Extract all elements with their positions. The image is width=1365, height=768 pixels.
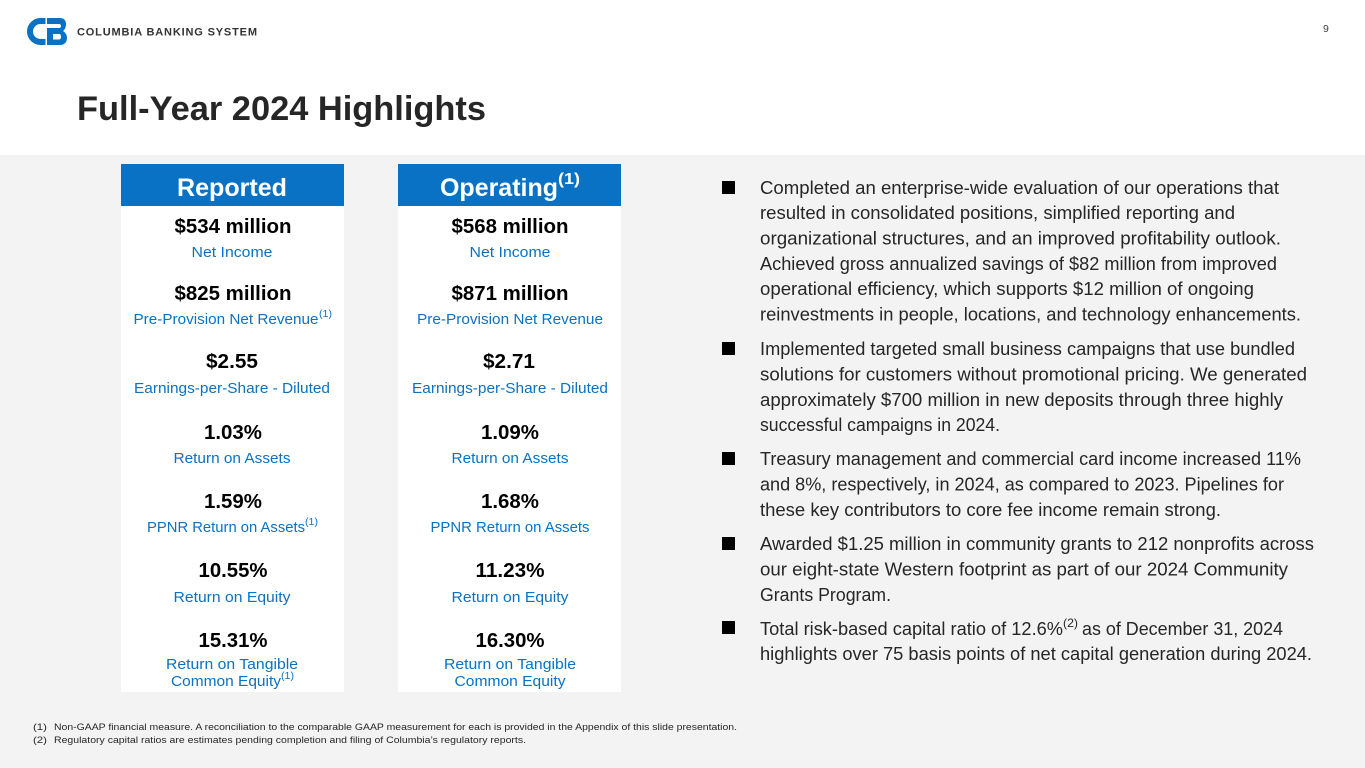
logo wordmark: COLUMBIA BANKING SYSTEM: [77, 26, 257, 38]
bullet 5: capital ratio: Total risk-based capital ratio of 12.6%: [760, 618, 1063, 639]
metric: ROTCE: Return on Tangible: [444, 657, 576, 673]
bullet 3: treasury management: [722, 448, 1301, 520]
metric: ROA: Return on Assets: [452, 451, 568, 467]
bullet 1: enterprise-wide evaluation: [722, 177, 1301, 324]
metric: net income: [452, 216, 568, 261]
bullet 5: capital ratio: (2): [1063, 616, 1078, 630]
footnotes: (1): [33, 722, 47, 733]
metric: PPNR ROA: PPNR Return on Assets: [430, 520, 590, 536]
bullet 4: community grants: our eight-state Western footprint as part of our 2024 Community: [760, 558, 1289, 580]
metric: ROA: [174, 422, 290, 467]
footnotes: (2): [33, 735, 47, 746]
metric: ROTCE: Common Equity: [171, 674, 282, 690]
panel header: Operating: (1): [558, 171, 580, 188]
bullet 3: treasury management: these key contributors to core fee income remain strong.: [760, 499, 1221, 520]
panel: Reported: [121, 164, 344, 692]
metric: ROE: Return on Equity: [452, 590, 569, 606]
content background: [0, 155, 1365, 768]
metric: PPNR ROA: 1.59%: [204, 491, 262, 513]
bullet 5: capital ratio: as of December 31, 2024: [1082, 618, 1283, 639]
metric: PPNR: Pre-Provision Net Revenue: [417, 312, 603, 328]
panel: Operating: [398, 164, 621, 692]
bullet 4: community grants: [722, 533, 1314, 605]
metric: EPS: $2.71: [483, 351, 535, 373]
metric: ROE: [174, 560, 291, 606]
bullet 1: enterprise-wide evaluation: reinvestments in people, locations, and technology enhancements.: [760, 304, 1301, 324]
metric: net income: Net Income: [192, 245, 272, 261]
metric: net income: Net Income: [470, 245, 550, 261]
bullet 1: enterprise-wide evaluation: operational efficiency, which supports $12 million of ongoing: [760, 278, 1254, 299]
metric: ROTCE: 16.30%: [476, 630, 545, 652]
metric: ROE: Return on Equity: [174, 590, 291, 606]
metric: net income: $568 million: [452, 216, 568, 238]
bullet 2: small business campaigns: approximately $700 million in new deposits through three highly: [760, 389, 1284, 410]
metric: ROTCE: Return on Tangible: [166, 657, 298, 673]
metric: net income: [174, 216, 292, 261]
bullet 5: capital ratio: highlights over 75 basis points of net capital generation during 2024.: [760, 643, 1312, 664]
bullet 1: enterprise-wide evaluation: organizational structures, and an improved profitability outlook.: [760, 228, 1281, 248]
bullet 1: enterprise-wide evaluation: Achieved gross annualized savings of $82 million from improved: [760, 253, 1277, 274]
footnotes: Non-GAAP financial measure. A reconciliation to the comparable GAAP measurement for each is provided in the Appendix of this slide presentation.: [54, 722, 737, 733]
metric: ROA: [452, 422, 568, 467]
metric: net income: $534 million: [174, 216, 292, 238]
metric: EPS: [134, 351, 330, 397]
bullet 3: treasury management: Treasury management and commercial card income increased 11%: [760, 448, 1301, 469]
metric: PPNR ROA: [430, 491, 590, 536]
bullet 2: small business campaigns: solutions for customers without promotional pricing. We generated: [760, 364, 1307, 384]
bullet 4: community grants: Grants Program.: [760, 584, 891, 605]
panel header: Reported: [121, 164, 344, 206]
metric: ROTCE: [444, 630, 576, 690]
metric: ROA: 1.03%: [204, 422, 262, 444]
metric: EPS: $2.55: [206, 351, 258, 373]
metric: ROTCE: Common Equity: [454, 674, 566, 690]
metric: PPNR: Pre-Provision Net Revenue: [134, 312, 318, 328]
footnotes: Regulatory capital ratios are estimates pending completion and filing of Columbia’s regulatory reports.: [54, 735, 526, 746]
metric: PPNR: [417, 283, 603, 328]
panel header: Reported: Reported: [177, 174, 287, 202]
footnotes: [33, 722, 737, 746]
metric: PPNR ROA: [147, 491, 318, 536]
metric: PPNR ROA: PPNR Return on Assets: [147, 520, 305, 536]
bullet 2: small business campaigns: Implemented targeted small business campaigns that use bundled: [760, 338, 1295, 359]
bullet 1: enterprise-wide evaluation: resulted in consolidated positions, simplified reporting and: [760, 202, 1235, 223]
bullet 5: capital ratio: [722, 616, 1312, 664]
panel header: Operating: Operating: [440, 174, 558, 202]
bullet 2: small business campaigns: successful campaigns in 2024.: [760, 414, 1000, 435]
metric: PPNR ROA: (1): [305, 517, 318, 528]
title: Full-Year 2024 Highlights: [77, 90, 486, 128]
panel header: Operating: [398, 164, 621, 206]
page number: 9: [1323, 23, 1329, 35]
metric: EPS: Earnings-per-Share - Diluted: [412, 381, 608, 397]
text block: highlights bullets: [722, 177, 1314, 664]
metric: ROTCE: [166, 630, 298, 690]
metric: PPNR: $825 million: [174, 283, 292, 305]
metric: ROE: 11.23%: [476, 560, 545, 582]
metric: PPNR: (1): [319, 309, 332, 320]
metric: PPNR: [134, 283, 332, 328]
icon: CB monogram: [30, 18, 67, 45]
metric: EPS: [412, 351, 608, 397]
logo: Columbia Banking System: [30, 18, 257, 45]
metric: ROTCE: (1): [281, 671, 294, 682]
metric: ROTCE: 15.31%: [198, 630, 268, 652]
bullet 1: enterprise-wide evaluation: Completed an enterprise-wide evaluation of our operations that: [760, 177, 1280, 198]
metric: PPNR ROA: 1.68%: [481, 491, 539, 513]
metric: PPNR: $871 million: [452, 283, 568, 305]
metric: ROE: [452, 560, 569, 606]
bullet 2: small business campaigns: [722, 338, 1307, 435]
metric: ROA: Return on Assets: [174, 451, 290, 467]
bullet 4: community grants: Awarded $1.25 million in community grants to 212 nonprofits across: [760, 533, 1314, 554]
metric: ROE: 10.55%: [198, 560, 268, 582]
metric: ROA: 1.09%: [481, 422, 539, 444]
metric: EPS: Earnings-per-Share - Diluted: [134, 381, 330, 397]
bullet 3: treasury management: and 8%, respectively, in 2024, as compared to 2023. Pipelines for: [760, 474, 1284, 494]
